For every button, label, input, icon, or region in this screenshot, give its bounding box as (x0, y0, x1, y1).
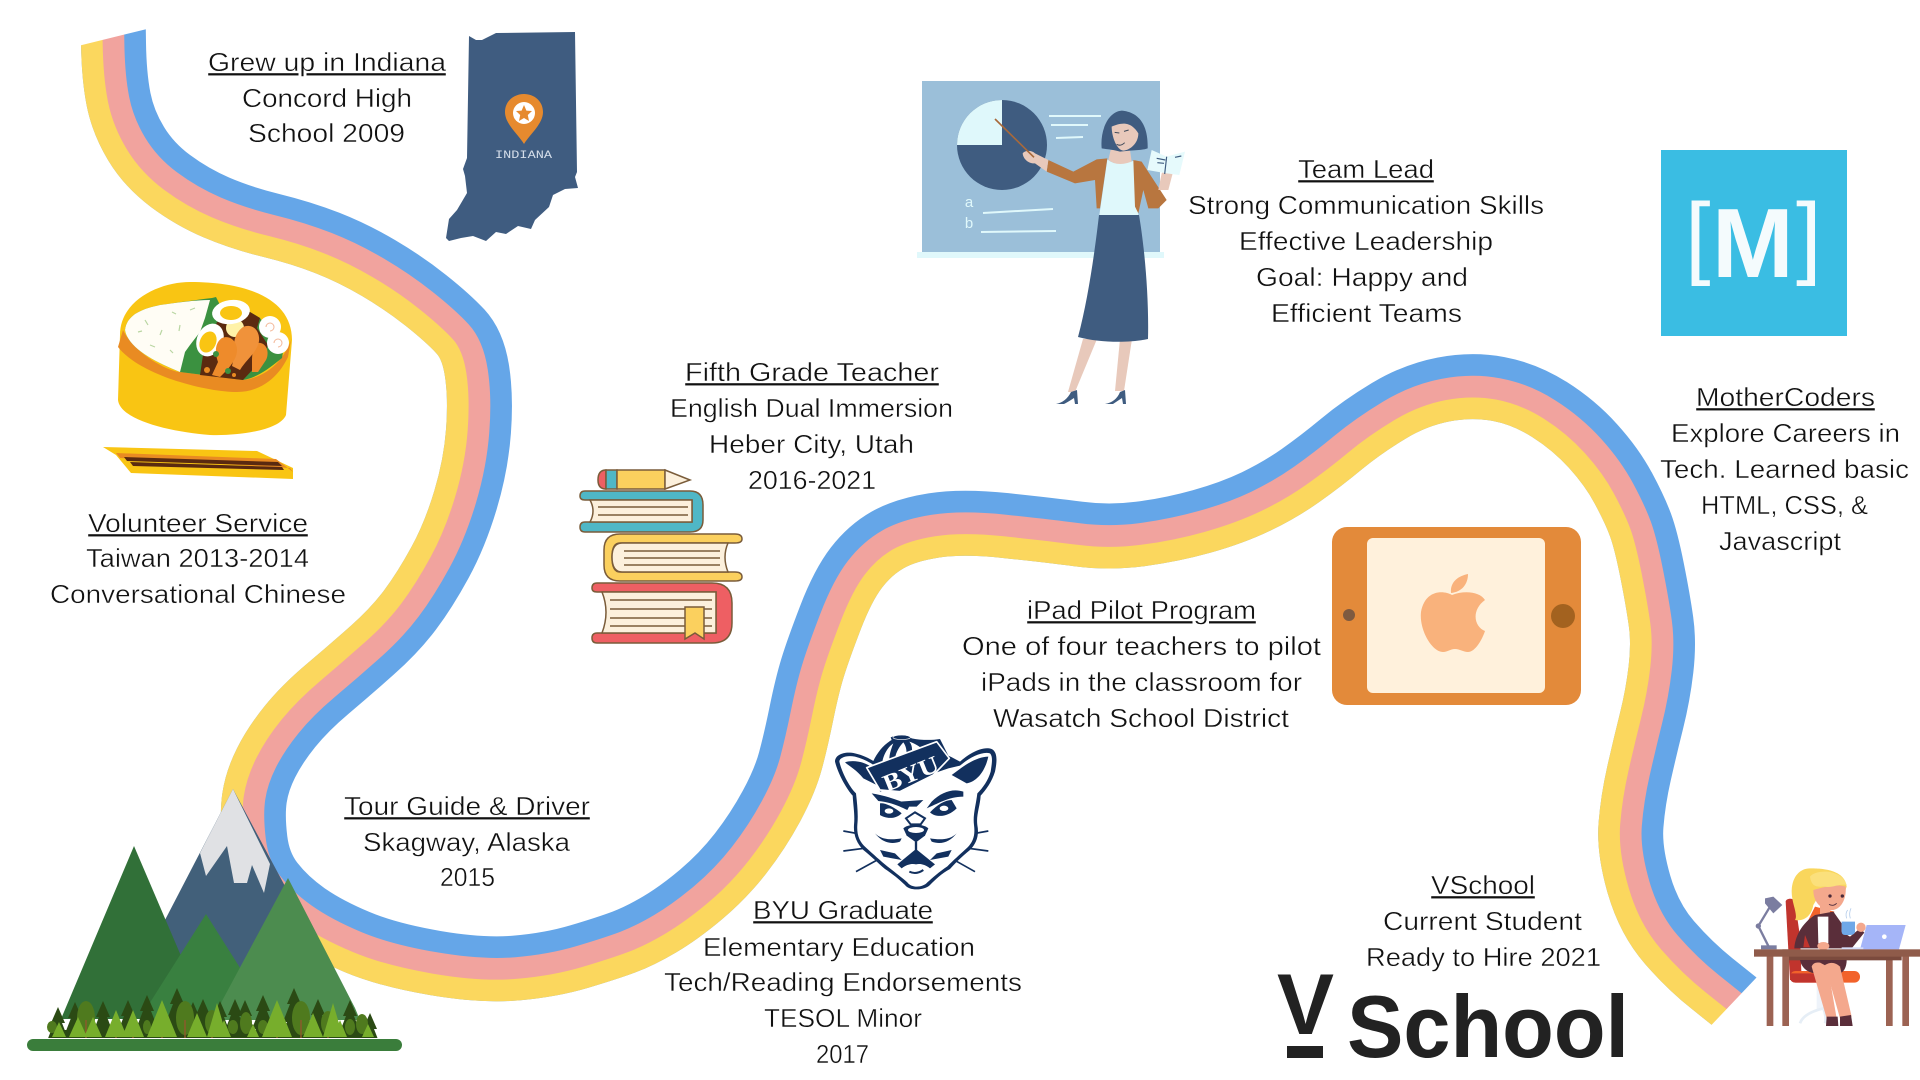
heading: Team Lead (1298, 154, 1434, 184)
body (1366, 906, 1601, 972)
presentation board (917, 81, 1164, 258)
text block: Team Lead (1188, 154, 1544, 328)
body: TESOL Minor (764, 1003, 922, 1033)
skirt and legs (1800, 960, 1853, 1026)
icon: tablet with apple (1332, 527, 1581, 705)
heading: VSchool (1431, 870, 1535, 900)
hair (1792, 868, 1847, 920)
icon: MotherCoders logo: [ (1685, 185, 1711, 287)
body: Concord High (242, 83, 412, 113)
body: Wasatch School District (993, 703, 1290, 733)
text block: Grew up in Indiana (208, 47, 447, 148)
body (50, 543, 346, 609)
body: Goal: Happy and (1256, 262, 1468, 292)
illustration: mountains and forest (27, 789, 402, 1063)
body: Efficient Teams (1271, 298, 1462, 328)
presentation board: b (965, 215, 973, 232)
text block: VSchool (1366, 870, 1601, 972)
body: HTML, CSS, & (1701, 490, 1868, 520)
icon: bento box (118, 282, 292, 435)
body: Strong Communication Skills (1188, 190, 1544, 220)
body (242, 83, 412, 148)
icon: Indiana map (446, 32, 578, 241)
body (1660, 418, 1909, 556)
icon: MotherCoders logo: M (1712, 188, 1794, 298)
body: Skagway, Alaska (363, 827, 571, 857)
body: Current Student (1383, 906, 1583, 936)
body: Tech/Reading Endorsements (664, 967, 1022, 997)
heading: Volunteer Service (88, 508, 308, 538)
body: 2015 (440, 862, 495, 892)
body: 2016-2021 (748, 465, 876, 495)
text block: Tour Guide and Driver (344, 791, 590, 892)
body: Elementary Education (703, 932, 975, 962)
body (363, 827, 571, 892)
teal book (580, 491, 703, 532)
body: Effective Leadership (1239, 226, 1493, 256)
body (962, 631, 1322, 733)
heading: iPad Pilot Program (1027, 595, 1256, 625)
trunks (86, 1020, 328, 1038)
body: Tech. Learned basic (1660, 454, 1909, 484)
illustration: woman at desk with laptop (1754, 868, 1920, 1026)
eyes and brow (872, 790, 963, 818)
body: Ready to Hire 2021 (1366, 942, 1601, 972)
VSchool logo: School (1347, 977, 1629, 1076)
text block: iPad Pilot Program (962, 595, 1322, 733)
food (125, 297, 289, 380)
forest (47, 988, 378, 1038)
body (1188, 190, 1544, 328)
mug and hand (1842, 908, 1866, 935)
woman figure (995, 111, 1185, 404)
presentation board: a (965, 194, 974, 211)
yellow book (604, 534, 742, 581)
body: Javascript (1719, 526, 1842, 556)
map label: INDIANA (495, 150, 552, 162)
laptop (1842, 925, 1906, 950)
body: English Dual Immersion (670, 393, 953, 423)
heading: Fifth Grade Teacher (685, 357, 939, 387)
red book (592, 583, 732, 643)
body: School 2009 (248, 118, 405, 148)
icon: MotherCoders logo: ] (1796, 185, 1822, 287)
chair (1786, 899, 1860, 1023)
nose and muzzle (897, 812, 935, 873)
pencil (598, 470, 690, 489)
icon: BYU cougar logo (835, 735, 996, 889)
text block: MotherCoders (1660, 382, 1909, 556)
body: Taiwan 2013-2014 (86, 543, 309, 573)
sailor cap (867, 735, 949, 798)
map pin (505, 94, 543, 144)
icon: MotherCoders logo (1661, 150, 1847, 336)
body: One of four teachers to pilot (962, 631, 1322, 661)
heading: MotherCoders (1696, 382, 1875, 412)
round trees (47, 1001, 368, 1035)
body: Conversational Chinese (50, 579, 346, 609)
cheek markings (875, 833, 957, 860)
rim (118, 330, 291, 392)
icon: chopsticks box (103, 447, 293, 479)
illustration: teacher at board (917, 81, 1185, 404)
body: Heber City, Utah (709, 429, 914, 459)
VSchool logo (1277, 957, 1629, 1076)
text block: Volunteer Service (50, 508, 346, 609)
light trees (52, 1000, 374, 1037)
heading: Grew up in Indiana (208, 47, 447, 77)
neck and face (1810, 872, 1847, 922)
jacket (1794, 912, 1864, 948)
text block: Fifth Grade Teacher (670, 357, 953, 495)
body: iPads in the classroom for (981, 667, 1302, 697)
ears (845, 757, 988, 785)
snow cap (200, 789, 270, 893)
icon: stack of books and pencil (580, 470, 742, 643)
desk (1754, 949, 1920, 1026)
VSchool logo: V (1277, 957, 1334, 1053)
heading: Tour Guide & Driver (344, 791, 590, 821)
text block: BYU Graduate (664, 895, 1022, 1069)
body: 2017 (816, 1039, 869, 1069)
body (664, 932, 1022, 1069)
lamp (1756, 897, 1782, 949)
dark trees (48, 988, 378, 1038)
sailor cap: BYU (879, 752, 943, 798)
ground (27, 1039, 402, 1051)
heading: BYU Graduate (753, 895, 933, 925)
body: Explore Careers in (1671, 418, 1900, 448)
body (670, 393, 953, 495)
